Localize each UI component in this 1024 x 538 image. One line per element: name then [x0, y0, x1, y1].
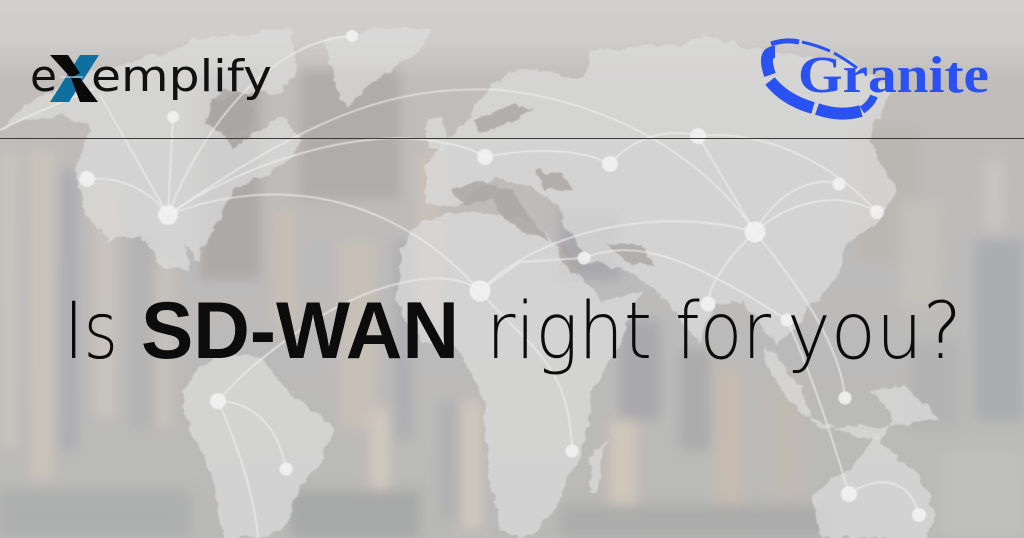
logo text: Granite [798, 47, 989, 104]
logo: Granite [767, 41, 989, 114]
logo text: e: e [30, 51, 57, 102]
logo text: emplify: emplify [91, 51, 272, 102]
title word: for: for [675, 287, 771, 377]
title word: you?: you? [787, 287, 962, 377]
map: Madagascar [590, 438, 607, 492]
map: Africa [396, 212, 640, 538]
logo mark: X [50, 55, 99, 102]
map: Indonesia [765, 345, 940, 440]
logo ring [767, 41, 874, 114]
map: South America [184, 352, 333, 538]
map: Australia [810, 432, 937, 538]
title word: SD-WAN: SD-WAN [141, 286, 459, 376]
map: Britain [424, 118, 448, 150]
map: Eurasia [425, 38, 896, 345]
title word: Is: Is [64, 287, 118, 377]
title word: right: right [486, 287, 652, 377]
divider line [0, 138, 1024, 139]
inland dark seas [207, 90, 655, 276]
map: North America [0, 28, 302, 270]
title [64, 286, 962, 377]
logo: exemplify [30, 51, 272, 102]
map: Greenland [326, 28, 433, 108]
network nodes [79, 30, 926, 522]
